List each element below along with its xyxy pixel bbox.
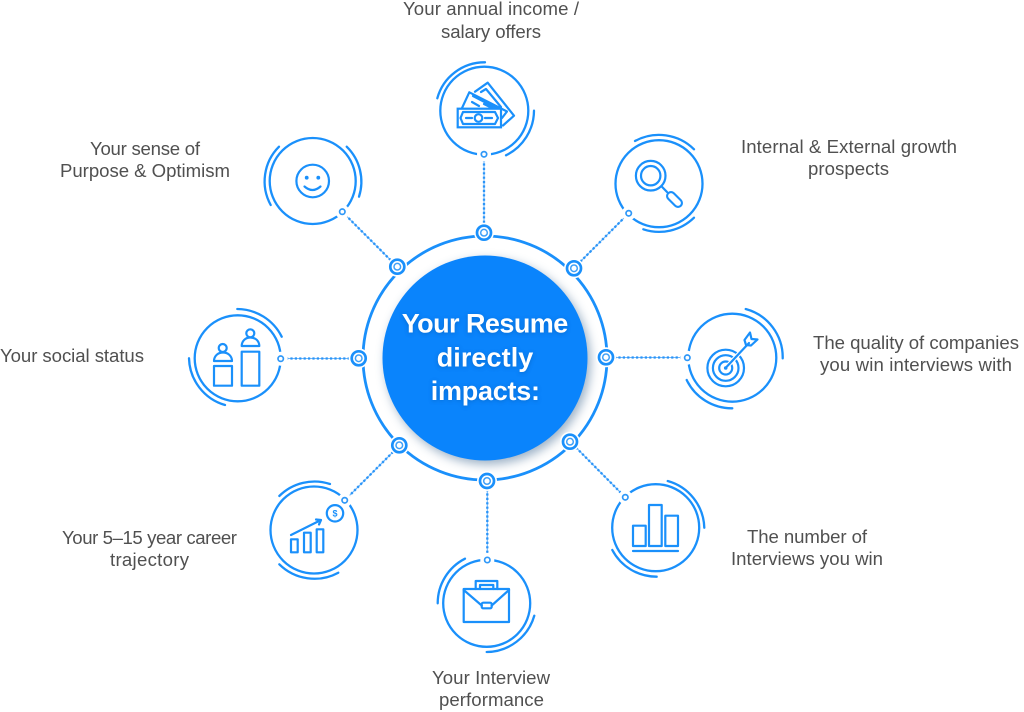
connector: career	[348, 451, 394, 497]
connector: social	[286, 358, 351, 360]
label: interview performance	[432, 667, 551, 710]
connector: interviews won	[576, 448, 622, 494]
ring node: upper right	[564, 258, 584, 278]
icon: bar chart	[612, 481, 704, 577]
label: purpose and optimism	[60, 138, 230, 181]
icon: growth chart with coin	[270, 482, 358, 579]
ring node: top	[474, 223, 494, 243]
label: interview performance: Your Interview	[432, 667, 551, 688]
icon: money bills	[437, 62, 534, 161]
label: annual income: salary offers	[441, 21, 541, 42]
ring node: left	[349, 348, 369, 368]
ring node: lower left	[389, 435, 409, 455]
label: growth prospects: Internal & External growth	[741, 136, 957, 157]
label: growth prospects: prospects	[808, 158, 889, 179]
label: annual income	[403, 0, 580, 42]
icon: smiley	[265, 138, 361, 224]
label: quality of companies: you win interviews with	[820, 354, 1012, 375]
label: quality of companies: The quality of companies	[813, 332, 1019, 353]
label: number of interviews: Interviews you win	[731, 548, 883, 569]
label: interview performance: performance	[439, 689, 544, 710]
label: growth prospects	[741, 136, 957, 179]
central heading	[402, 309, 568, 406]
label: career trajectory: trajectory	[110, 549, 190, 570]
label: purpose and optimism: Purpose & Optimism	[60, 160, 230, 181]
ring node: bottom	[477, 471, 497, 491]
icon: growth chart with coin: $	[332, 508, 338, 518]
label: career trajectory	[62, 527, 237, 570]
connector: purpose	[346, 215, 392, 262]
label: number of interviews	[731, 526, 883, 569]
icon: magnifier	[616, 135, 702, 232]
icon: briefcase	[438, 553, 534, 652]
central heading: impacts:	[431, 376, 540, 406]
central heading: directly	[437, 343, 533, 373]
label: career trajectory: Your 5–15 year career	[62, 527, 237, 548]
label: social status: Your social status	[0, 345, 144, 366]
icon: target with arrow	[680, 309, 783, 408]
ring node: lower right	[560, 432, 580, 452]
connector: interview performance	[486, 489, 488, 555]
central circle	[382, 256, 588, 460]
icon: people on bars	[189, 309, 288, 405]
label: purpose and optimism: Your sense of	[90, 138, 201, 159]
outer ring around central circle	[363, 236, 607, 480]
ring node: upper left	[387, 257, 407, 277]
central heading: Your Resume	[402, 309, 568, 339]
label: quality of companies	[813, 332, 1019, 375]
ring node: right	[596, 347, 616, 367]
label: number of interviews: The number of	[747, 526, 868, 547]
connector: growth	[579, 216, 626, 263]
connector: companies	[614, 356, 683, 358]
connector: income	[483, 159, 485, 226]
